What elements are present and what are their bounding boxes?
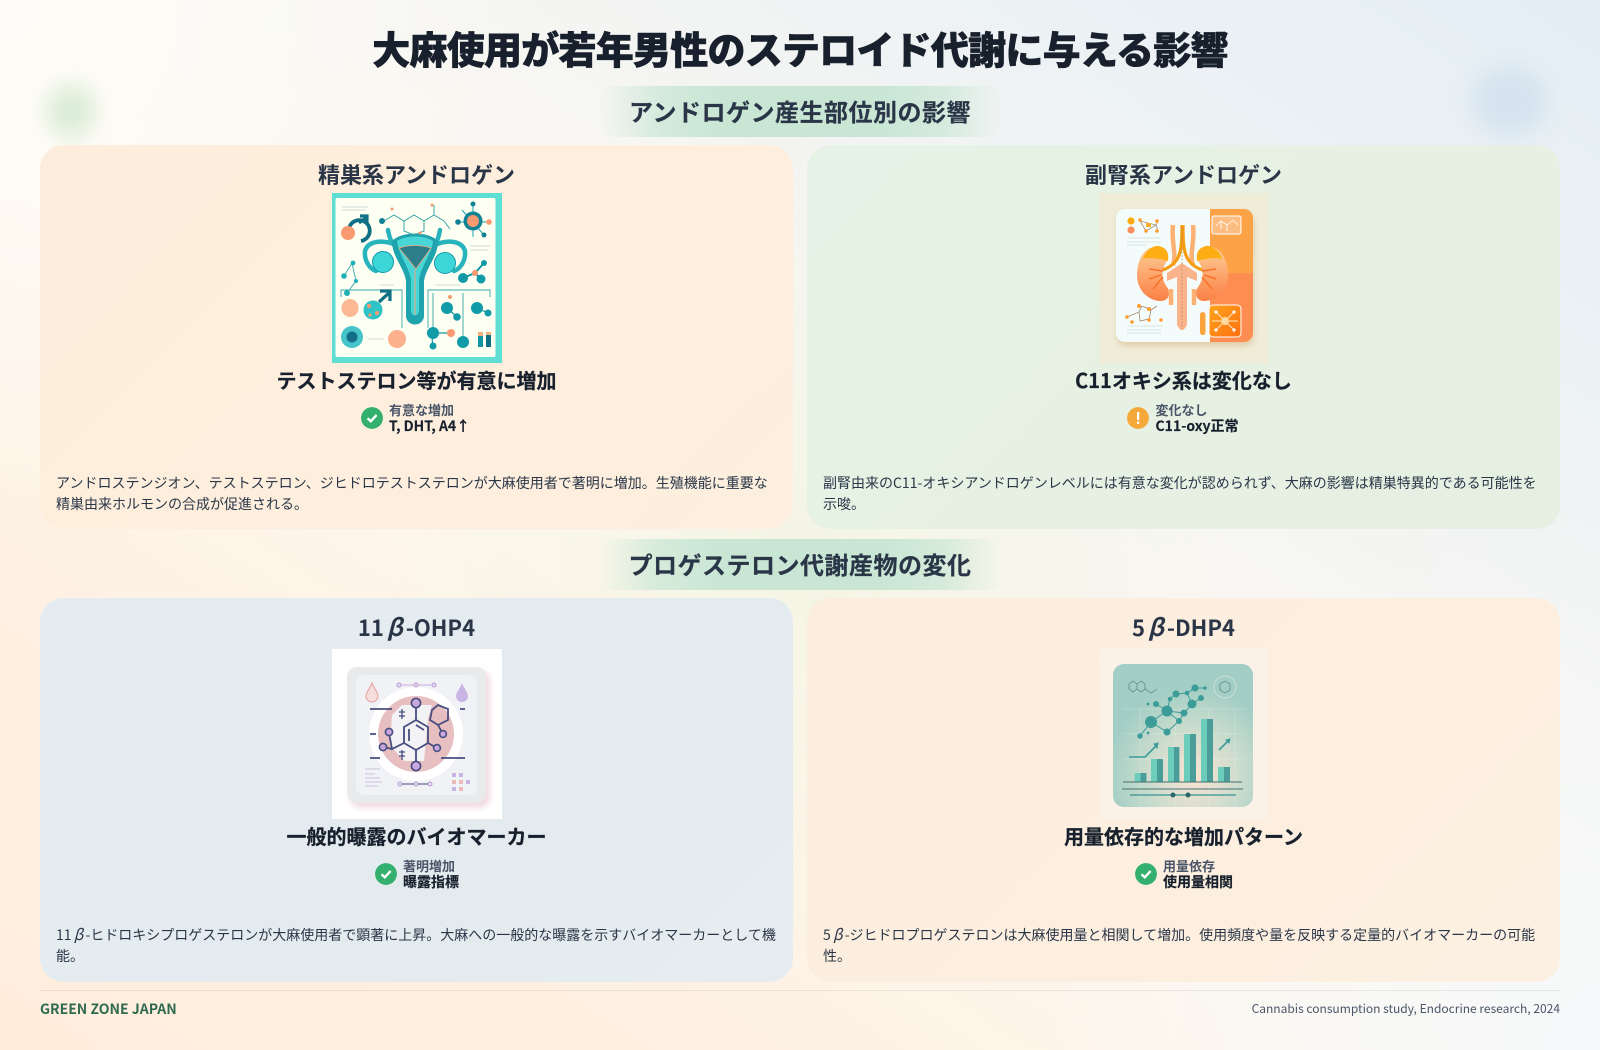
subtitle: C11オキシ系は変化なし [1075,365,1292,394]
panel title: 精巣系アンドロゲン [318,158,515,190]
badge value: C11-oxy正常 [1156,416,1238,436]
status badge [361,400,470,436]
section heading: androgen sites [598,86,1002,137]
footer brand: GREEN ZONE JAPAN [40,999,177,1019]
panel title: β [387,608,403,643]
illustration: reproductive system [332,193,502,363]
status badge [1127,400,1238,436]
description: β [833,923,842,945]
badge value: T, DHT, A4↑ [389,416,470,436]
illustration: dose-response chart [1113,664,1253,807]
badge label: 用量依存 [1163,856,1215,875]
status badge [375,856,459,892]
description: アンドロステンジオン、テストステロン、ジヒドロテストステロンが大麻使用者で著明に増加。生殖機能に重要な精巣由来ホルモンの合成が促進される。 [56,473,768,514]
footer source: Cannabis consumption study, Endocrine research, 2024 [1252,1000,1560,1017]
subtitle: 用量依存的な増加パターン [1064,821,1303,850]
description: 11 -ヒドロキシプロゲステロンが大麻使用者で顕著に上昇。大麻への一般的な曝露を示すバイオマーカーとして機能。 [56,925,776,966]
badge value: 曝露指標 [403,872,459,892]
panel title: 副腎系アンドロゲン [1085,158,1282,190]
panel: 11β-OHP4 [40,598,793,982]
title: 大麻使用が若年男性のステロイド代謝に与える影響 [372,20,1228,75]
badge label: 変化なし [1156,400,1208,419]
panel: 5β-DHP4 [807,598,1560,982]
description: 副腎由来のC11-オキシアンドロゲンレベルには有意な変化が認められず、大麻の影響は精巣特異的である可能性を示唆。 [823,473,1537,514]
section heading: progesterone metabolites: プロゲステロン代謝産物の変化 [628,546,972,581]
badge label: 著明増加 [403,856,455,875]
subtitle: テストステロン等が有意に増加 [276,365,556,394]
icon: check [1135,863,1157,885]
icon: warning [1127,407,1149,429]
description: β [74,923,83,945]
icon: check [361,407,383,429]
badge label: 有意な増加 [389,400,454,419]
section heading: androgen sites: アンドロゲン産生部位別の影響 [629,93,971,128]
illustration: adrenal and kidney [1099,193,1269,363]
description: 5 -ジヒドロプロゲステロンは大麻使用量と相関して増加。使用頻度や量を反映する定量的バイオマーカーの可能性。 [823,925,1535,966]
status badge [1135,856,1233,892]
panel title: 5 -DHP4 [1132,611,1235,643]
badge value: 使用量相関 [1163,872,1233,892]
panel title: β [1148,608,1164,643]
panel: testicular androgens [40,145,793,529]
subtitle: 一般的曝露のバイオマーカー [286,821,546,850]
section heading: progesterone metabolites [598,539,1002,590]
panel title: 11 -OHP4 [358,611,475,643]
illustration: molecule [332,649,502,819]
panel: adrenal androgens [807,145,1560,529]
icon: check [375,863,397,885]
decorative blob: green [46,84,96,138]
decorative blob: blue [1472,66,1548,136]
